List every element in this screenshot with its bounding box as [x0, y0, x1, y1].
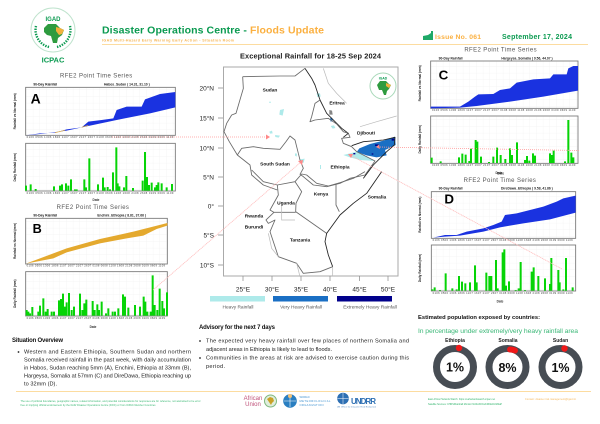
country labels: Somalia	[368, 195, 387, 201]
legend: Extremely Heavy Rainfall	[343, 304, 397, 310]
donut: Sudan: 1%	[551, 361, 570, 375]
map logo: IGAD	[379, 76, 388, 80]
subtitle: IGAD Multi-Hazard Early Warning Early Action - Situation Room	[102, 38, 234, 42]
chart B: Enchini, Ethiopia: 90-Day Rainfall	[33, 214, 57, 218]
legend	[210, 296, 397, 310]
title: Disaster Operations Centre - Floods Update	[102, 24, 324, 36]
date axis label A: Date	[93, 198, 100, 202]
country labels: Ethiopia	[330, 165, 350, 171]
issue number: Issue No. 061	[435, 34, 481, 41]
chart A: Habos, Sudan: 0106 0506 1306 1806 1107 1607 2107 2607 0108 0608 1108 1608 2108 2608 0109 0609 1109	[27, 191, 174, 195]
chart D: DireDawa, Ethiopia: DireDawa_Ethiopia ( 9.58, 41.86 )	[501, 187, 553, 191]
chart C: Hargeysa, Somalia: RFE2 Point Time Series	[464, 47, 537, 53]
chart C: Hargeysa, Somalia: Date	[497, 171, 504, 175]
footer sources	[428, 398, 502, 406]
situation overview	[12, 338, 191, 388]
donut: Somalia: Somalia	[498, 338, 518, 344]
logo: African Union	[244, 395, 276, 408]
chart D: DireDawa, Ethiopia: Daily Rainfall (mm)	[418, 254, 422, 282]
longitude axis: 40°E	[323, 286, 338, 294]
advisory: The expected very heavy rainfall over few places of northern Somalia and	[206, 338, 409, 344]
latitude axis	[199, 84, 223, 270]
logo: WMO	[283, 394, 331, 408]
chart D: DireDawa, Ethiopia: 0106 0506 1306 1806 1107 1607 2107 2607 0108 0608 1108 1608 2108 2608 0109 0609 1109	[433, 291, 573, 295]
chart A: Habos, Sudan: 0106 0506 1306 1806 1107 1607 2107 2607 0108 0608 1108 1608 2108 2608 0109 0609 1109	[27, 135, 174, 139]
donut: Ethiopia: Ethiopia	[445, 338, 465, 344]
country labels: Kenya	[314, 192, 329, 198]
country labels: Djibouti	[357, 131, 375, 137]
chart B: Enchini, Ethiopia: 0106 0506 1306 1806 1107 1607 2107 2607 0108 0608 1108 1608 2108 2608 0109 0609 1109	[27, 316, 166, 320]
arrow: B to map	[153, 160, 303, 290]
chart A: Habos, Sudan: RFE2 Point Time Series	[60, 74, 133, 80]
latitude axis: 0°	[208, 202, 214, 210]
latitude axis: 5°N	[203, 174, 214, 182]
chart C: Hargeysa, Somalia: C	[439, 67, 449, 82]
country labels: Uganda	[277, 201, 295, 207]
chart B: Enchini, Ethiopia: Date	[90, 325, 97, 329]
longitude axis: 50°E	[381, 286, 396, 294]
chart D: DireDawa, Ethiopia: 0106 0506 1306 1806 1107 1607 2107 2607 0108 0608 1108 1608 2108 2608 0109 0609 1109	[433, 238, 573, 242]
footer sources: Satellite Sources: CHRS/RainFall Monitor NASA/NOAA/RFE2/GSMaP	[428, 403, 502, 406]
advisory: Advisory for the next 7 days	[199, 325, 276, 331]
country labels: Rwanda	[245, 214, 264, 220]
donut: Sudan	[542, 338, 579, 386]
chart B: Enchini, Ethiopia: B	[33, 222, 42, 236]
chart A: Habos, Sudan: Daily Rainfall (mm)	[13, 153, 17, 182]
longitude axis: 35°E	[294, 286, 309, 294]
latitude axis: 5°S	[203, 232, 215, 240]
chart C: Hargeysa, Somalia	[418, 47, 578, 175]
chart D: DireDawa, Ethiopia: D	[444, 191, 454, 206]
latitude axis: 15°N	[199, 114, 214, 122]
situation overview: to 32mm (D).	[24, 382, 57, 388]
population exposure: Estimated population exposed by countries:	[418, 315, 540, 321]
chart A: Habos, Sudan: 90-Day Rainfall	[33, 83, 57, 87]
advisory: Communities in the areas at risk are advised to exercise caution during this	[206, 356, 409, 362]
chart D: DireDawa, Ethiopia: Date	[497, 299, 504, 303]
map: East Africa rainfall	[199, 67, 398, 294]
chart C: Hargeysa, Somalia: 0106 0506 1306 1806 1107 1607 2107 2607 0108 0608 1108 1608 2108 2608 0109 0609 1109	[432, 163, 576, 167]
logo: WMO: ORGANIZATION	[300, 403, 324, 407]
chart A: Habos, Sudan	[13, 74, 175, 195]
arrow: D to map	[348, 154, 562, 269]
legend: Heavy Rainfall	[223, 304, 253, 310]
footer disclaimer	[20, 400, 201, 407]
icon: issue	[423, 31, 433, 40]
advisory	[199, 325, 409, 370]
population exposure	[418, 315, 579, 386]
donut: Sudan: Sudan	[553, 338, 568, 344]
donut: Ethiopia	[436, 338, 474, 386]
donut: Somalia: 8%	[498, 361, 517, 375]
logo: IGAD ICPAC: IGAD	[46, 17, 61, 23]
longitude axis: 25°E	[236, 286, 251, 294]
logo: IGAD ICPAC: ICPAC	[42, 56, 65, 64]
latitude axis: 10°N	[199, 144, 214, 152]
chart C: Hargeysa, Somalia: Hargeysa_Somalia ( 9.56, 44.07 )	[501, 56, 553, 60]
donut: Ethiopia: 1%	[446, 360, 464, 374]
map logo	[370, 73, 396, 99]
arrow: A to map	[112, 134, 270, 140]
chart C: Hargeysa, Somalia: 90-Day Rainfall	[439, 56, 463, 60]
chart D: DireDawa, Ethiopia: Rainfall vs Normal (mm)	[418, 197, 422, 233]
southern borders	[252, 170, 382, 277]
date: September 17, 2024	[502, 34, 572, 41]
logo: WMO: WORLD	[300, 395, 310, 399]
situation overview: Hargeysa, Somalia at 57mm (C) and DireDawa, Ethiopia reaching up	[24, 374, 191, 380]
longitude axis	[236, 276, 396, 294]
chart A: Habos, Sudan: A	[31, 90, 41, 106]
logo: African Union: African	[244, 396, 262, 402]
donut: Somalia	[489, 338, 526, 386]
chart A: Habos, Sudan: Rainfall vs Normal (mm)	[13, 93, 17, 129]
logo: UNDRR: UN Office for Disaster Risk Reduction	[337, 406, 376, 408]
chart C: Hargeysa, Somalia: Daily Rainfall (mm)	[418, 125, 422, 154]
country labels: Sudan	[263, 88, 277, 94]
footer disclaimer: free or implying official endorsement by the DoD/ Disaster Operations Centre (DOC) or from ICPAC Member Countries	[20, 404, 156, 407]
chart B: Enchini, Ethiopia	[13, 205, 167, 329]
footer contact: Contact: disaster.risk.management@igad.int	[525, 398, 576, 401]
chart B: Enchini, Ethiopia: Daily Rainfall (mm)	[13, 279, 17, 308]
chart B: Enchini, Ethiopia: RFE2 Point Time Series	[57, 205, 129, 211]
logo: IGAD ICPAC	[31, 8, 75, 64]
advisory: period.	[206, 364, 225, 370]
chart B: Enchini, Ethiopia: Enchini_Ethiopia ( 8.81, 37.66 )	[97, 214, 146, 218]
map title: Exceptional Rainfall for 18-25 Sep 2024	[240, 52, 382, 60]
chart D: DireDawa, Ethiopia: 90-Day Rainfall	[439, 187, 463, 191]
situation overview: Western and Eastern Ethiopia, Southern Sudan and northern	[24, 350, 191, 356]
country labels	[245, 88, 387, 244]
date axis label C top: Date	[496, 171, 503, 175]
logo: African Union: Union	[245, 402, 261, 408]
situation overview: Situation Overview	[12, 338, 63, 344]
logo: WMO: METEOROLOGICAL	[300, 399, 331, 403]
longitude axis: 30°E	[265, 286, 280, 294]
situation overview: in Habos, Sudan reaching 5mm (A), Enchini, Ethiopia at 33mm (B),	[24, 366, 191, 372]
situation overview: Somalia received rainfall in the past week, with daily accumulation	[24, 358, 191, 364]
header	[31, 8, 572, 64]
country labels: Burundi	[245, 225, 263, 231]
footer sources: East Africa Hazards Watch: https://eahazardswatch.icpac.net	[428, 398, 495, 401]
logo: UNDRR	[337, 393, 376, 408]
latitude axis: 10°S	[200, 262, 215, 270]
footer disclaimer: The use of political boundaries, geographic names, related information, and potential considerations for responses are for reference, not warranted to be error	[20, 400, 201, 403]
chart D: DireDawa, Ethiopia: RFE2 Point Time Series	[464, 178, 536, 184]
chart C: Hargeysa, Somalia: 0106 0506 1306 1806 1107 1607 2107 2607 0108 0608 1108 1608 2108 2608 0109 0609 1109	[432, 108, 576, 112]
country labels: Eritrea	[329, 101, 345, 107]
chart C: Hargeysa, Somalia: Rainfall vs Normal (mm)	[418, 65, 422, 101]
country labels: South Sudan	[260, 162, 290, 168]
latitude axis: 20°N	[199, 84, 214, 92]
population exposure: In percentage under extremely/very heavy rainfall area	[418, 328, 578, 335]
chart B: Enchini, Ethiopia: 0106 0506 1306 1806 1107 1607 2107 2607 0108 0608 1108 1608 2108 2608 0109 0609 1109	[27, 264, 166, 268]
legend: Very Heavy Rainfall	[280, 304, 322, 310]
chart A: Habos, Sudan: Habos_Sudan ( 14.31, 31.10 )	[104, 83, 150, 87]
chart D: DireDawa, Ethiopia	[418, 178, 576, 303]
longitude axis: 45°E	[352, 286, 367, 294]
chart B: Enchini, Ethiopia: Rainfall vs Normal (mm)	[13, 223, 17, 259]
country labels: Tanzania	[290, 238, 310, 244]
logo: UNDRR: UNDRR	[351, 397, 376, 406]
advisory: adjacent areas in Ethiopia is likely to lead to floods.	[206, 347, 332, 353]
rainfall patches and northern borders	[224, 68, 397, 190]
arrow: C to map	[376, 144, 579, 150]
